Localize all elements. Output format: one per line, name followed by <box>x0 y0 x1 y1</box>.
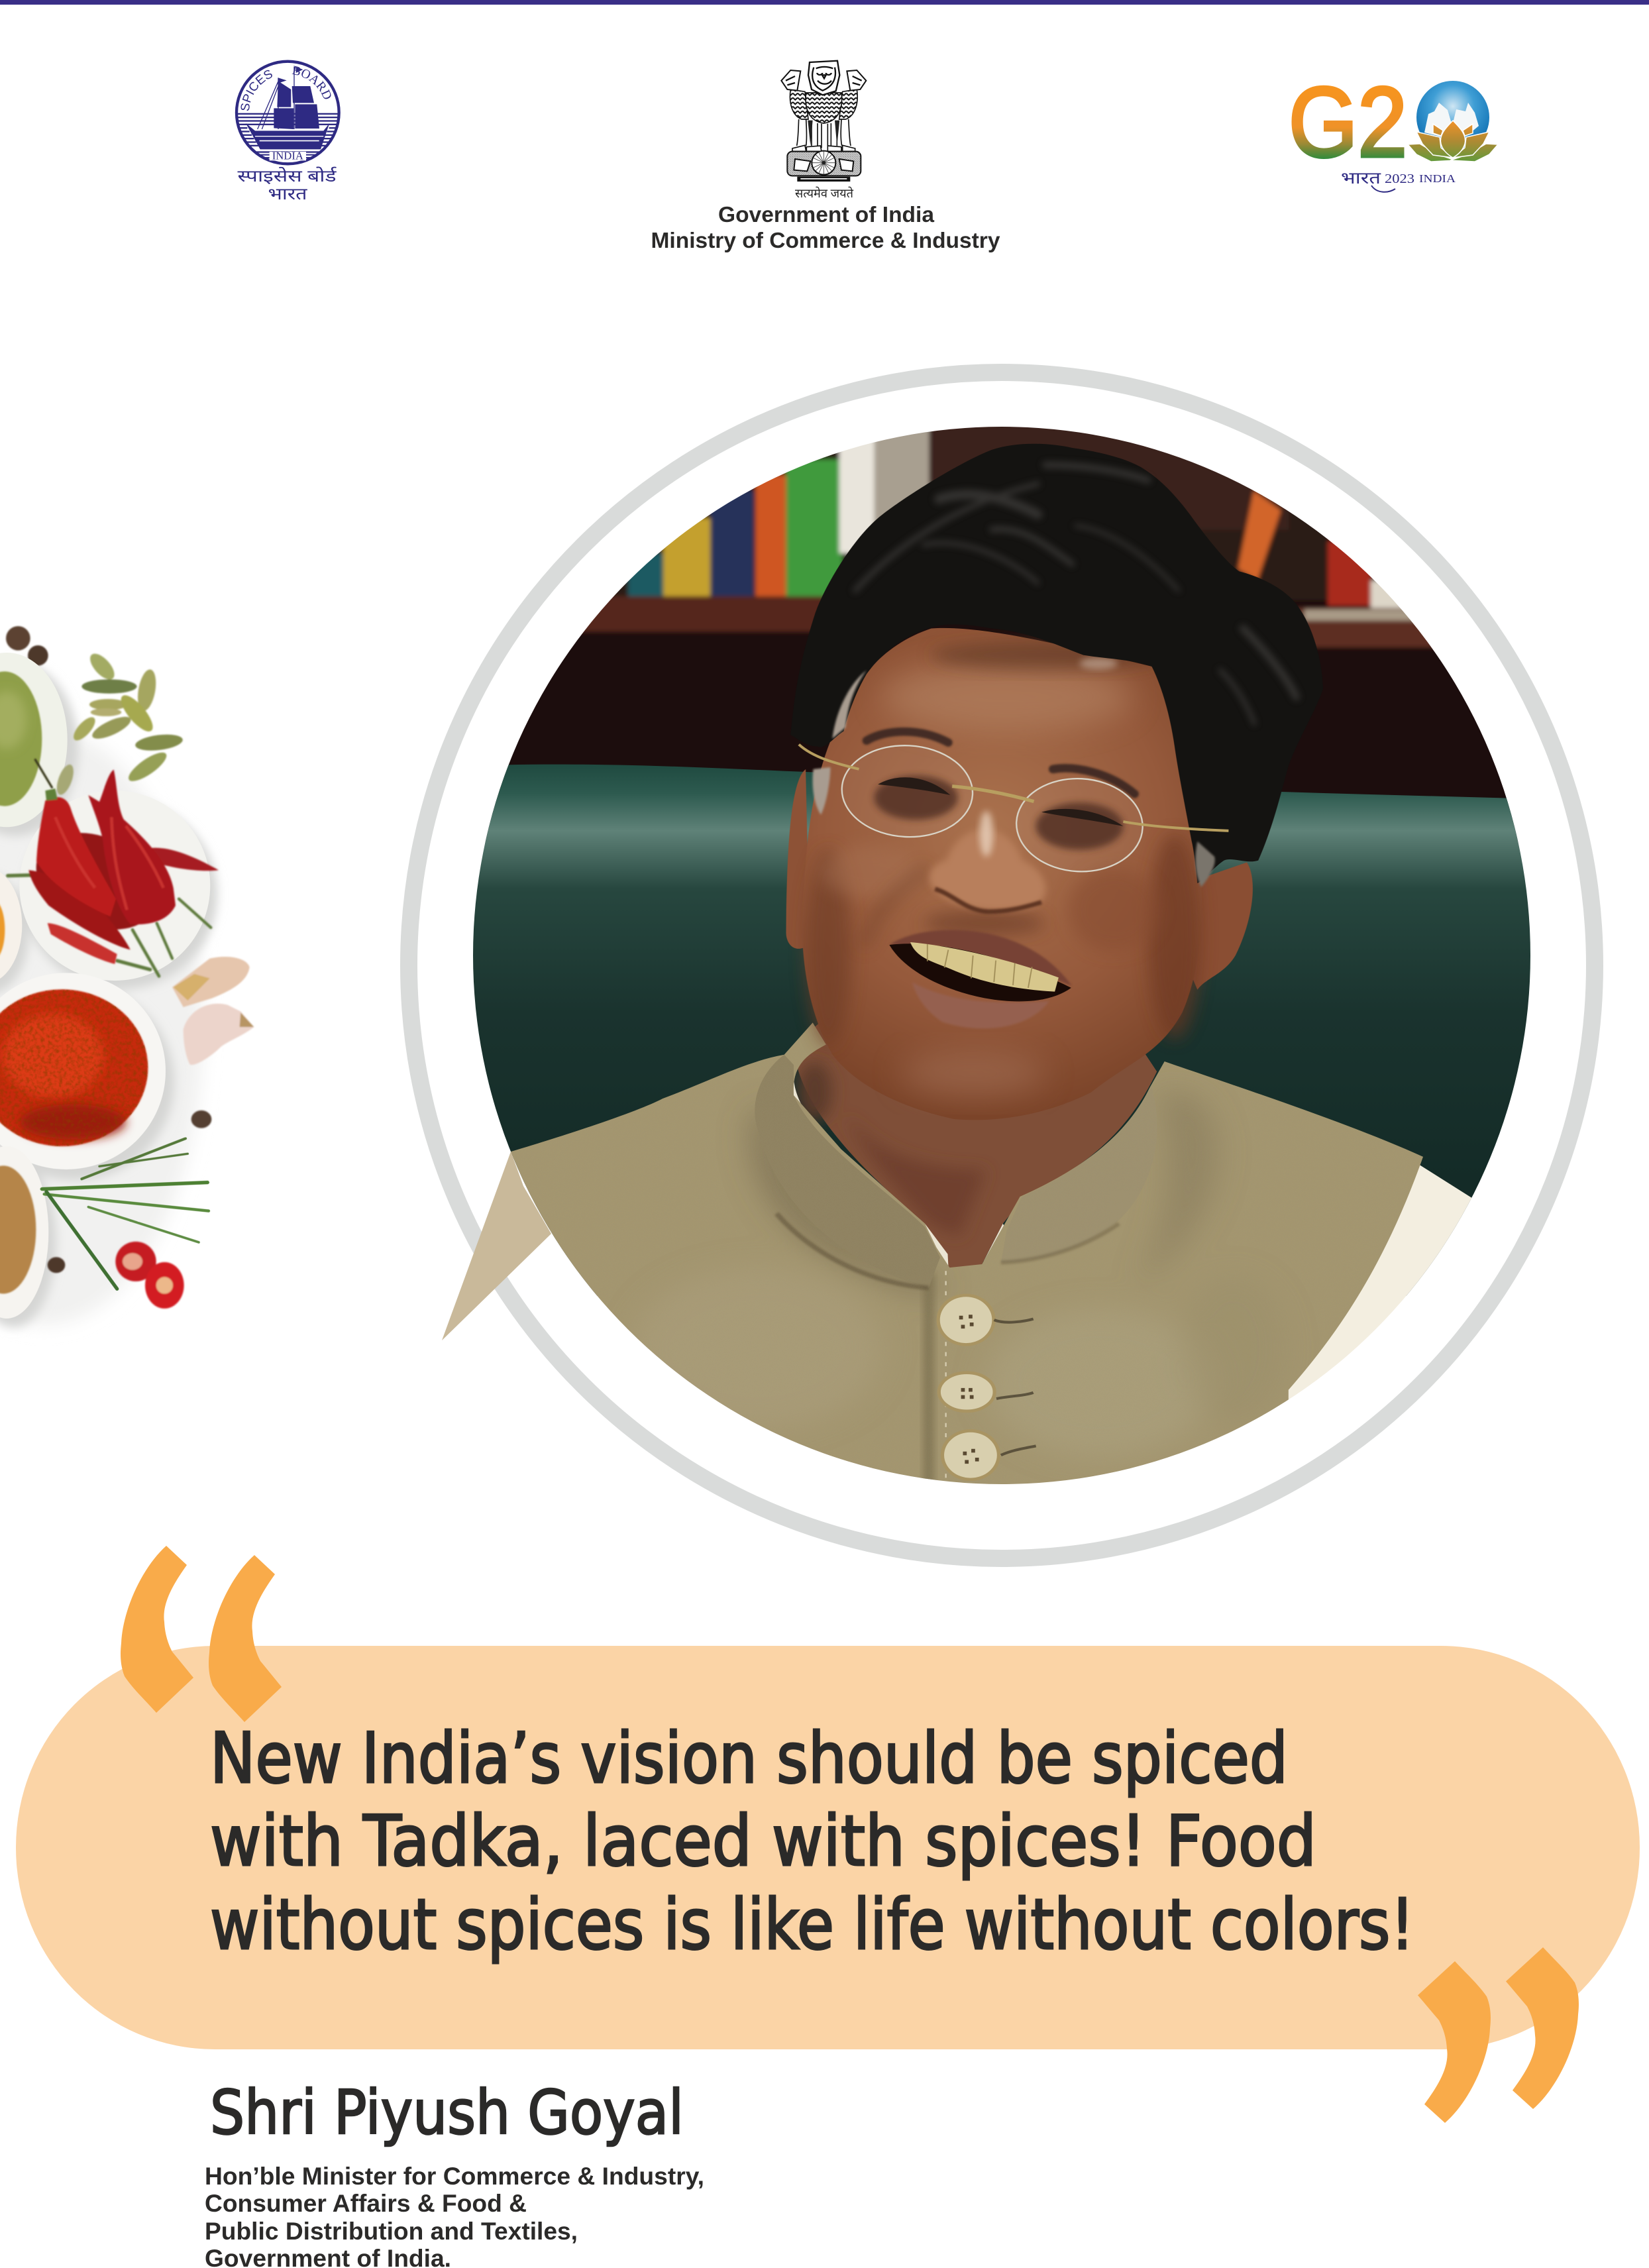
emblem motto: सत्यमेव जयते <box>795 186 854 203</box>
Bharat 2023 India tagline: 2023 <box>1385 172 1414 186</box>
globe <box>1416 81 1489 154</box>
hair <box>790 444 1323 883</box>
green herb stalks <box>42 1138 209 1289</box>
white inner shirt <box>792 1058 1006 1269</box>
eyebrows <box>867 731 1135 794</box>
neck shadow <box>798 1061 986 1237</box>
eyes <box>878 777 1123 826</box>
top border bar <box>0 0 1649 5</box>
lotus <box>1408 121 1498 162</box>
logo ring and ship emblem: INDIA <box>272 150 303 162</box>
logo ring and ship emblem <box>235 60 341 166</box>
bookcase background <box>485 427 1518 845</box>
face shading <box>806 641 1201 1096</box>
speaker title <box>205 2163 704 2268</box>
logo Hindi wordmark: स्पाइसेस बोर्ड <box>237 166 337 189</box>
body and vest <box>492 994 1442 1535</box>
speaker title: Hon’ble Minister for Commerce & Industry, <box>205 2163 704 2190</box>
right ear <box>1186 862 1253 990</box>
kurta buttons <box>938 1295 1036 1480</box>
grey temple <box>813 671 867 815</box>
smile <box>889 930 1072 1028</box>
speaker title: Public Distribution and Textiles, <box>205 2218 578 2245</box>
bowl with red chillies <box>8 760 219 981</box>
bowl drop shadows <box>0 661 217 1327</box>
heading: Ministry of Commerce & Industry: Ministry of Commerce & Industry <box>651 228 1000 252</box>
vest shading and folds <box>492 994 1442 1535</box>
green sofa <box>445 765 1578 1296</box>
speaker name: Shri Piyush Goyal <box>210 2077 684 2148</box>
quote text <box>210 1718 1414 1965</box>
speech ring around portrait <box>409 372 1595 1558</box>
speaker title: Consumer Affairs & Food & <box>205 2190 527 2217</box>
speech pointer <box>442 1152 551 1340</box>
Bharat 2023 India tagline: INDIA <box>1419 172 1456 185</box>
neck <box>794 1014 1157 1271</box>
logo: G20 India 2023 <box>1289 66 1498 192</box>
quote bubble <box>16 1646 1640 2049</box>
rimless glasses <box>799 742 1228 875</box>
garlic cloves <box>172 957 254 1065</box>
cardamom pods <box>70 649 184 786</box>
logo: national emblem <box>781 61 866 203</box>
quote text: with Tadka, laced with spices! Food <box>210 1801 1316 1882</box>
left ear <box>786 769 810 949</box>
peppercorns <box>6 626 211 1273</box>
red chilli slices <box>115 1242 184 1309</box>
bowl of orange spice <box>0 867 22 984</box>
bowl of green spice <box>0 653 68 827</box>
quote text: New India’s vision should be spiced <box>210 1718 1288 1799</box>
heading: Government of India: Government of India <box>718 202 935 227</box>
logo Hindi wordmark: भारत <box>268 186 307 207</box>
left collar band <box>755 1055 940 1288</box>
chilli stems <box>8 760 211 976</box>
grey hair sheen <box>855 465 1297 724</box>
vest fabric <box>492 1022 1423 1535</box>
face <box>802 628 1202 1120</box>
Bharat 2023 India tagline: भारत <box>1341 170 1381 191</box>
Bharat 2023 India tagline <box>1341 170 1456 192</box>
white kurta sleeve <box>1288 1165 1472 1399</box>
emblem lion capital <box>781 61 866 182</box>
logo ring and ship emblem: BOARD <box>292 66 331 99</box>
opening quotation mark <box>121 1546 282 1722</box>
logo Hindi wordmark <box>237 166 337 207</box>
quote text: without spices is like life without colors! <box>210 1884 1414 1965</box>
logo: Spices Board India <box>235 60 341 207</box>
nose <box>930 811 1045 912</box>
soft table shadow <box>0 729 203 1325</box>
bowl of red chilli powder <box>0 973 166 1169</box>
G2 lettering: G2 <box>1289 66 1407 178</box>
closing quotation mark <box>1418 1947 1579 2123</box>
logo ring and ship emblem: SPICES <box>241 70 272 111</box>
eye sockets <box>874 776 1123 850</box>
head <box>786 444 1323 1120</box>
right collar band <box>1001 1085 1157 1262</box>
spices photo cluster <box>0 626 254 1327</box>
portrait photo: Shri Piyush Goyal <box>445 405 1578 1535</box>
chilli pods <box>21 770 219 964</box>
bowl of ground spice <box>0 1146 48 1319</box>
